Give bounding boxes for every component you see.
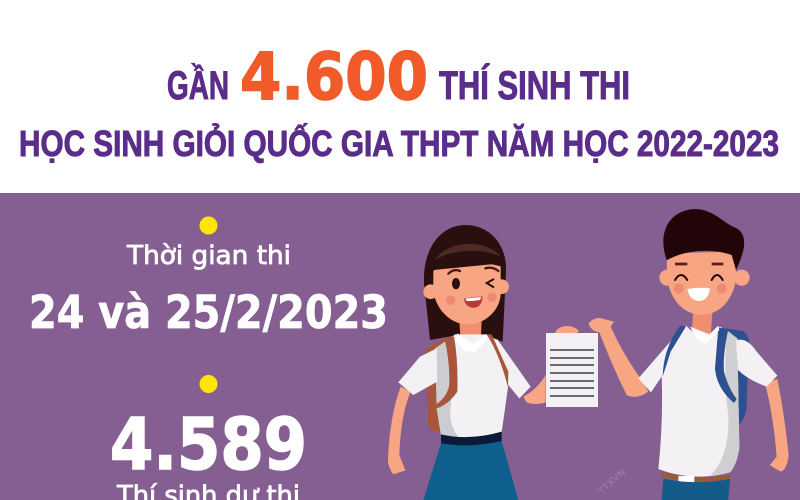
girl belt [441, 432, 502, 446]
girl ears [423, 279, 509, 299]
boy face [667, 252, 736, 315]
boy belt buckle [678, 476, 694, 483]
boy left sleeve [638, 340, 672, 392]
panel: purple background [0, 193, 800, 500]
boy eyes [675, 275, 723, 280]
girl back hair [424, 225, 506, 342]
paper text lines [550, 350, 594, 396]
value: candidate count: 4.589 [110, 403, 307, 486]
boy smile [687, 288, 710, 301]
girl left arm [388, 387, 411, 474]
value: exam date: 24 và 25/2/2023 [29, 286, 388, 339]
boy ears [659, 270, 750, 286]
girl right sleeve [497, 338, 531, 398]
girl brows [448, 268, 498, 274]
girl neck [459, 320, 482, 342]
boy shirt [658, 326, 739, 477]
girl collar [455, 333, 487, 352]
exam time block [29, 216, 388, 339]
boy collar [690, 326, 719, 344]
girl backpack [425, 338, 443, 432]
boy trousers [662, 478, 730, 500]
boy brows [675, 260, 723, 268]
paper sheet [546, 333, 598, 407]
girl backpack straps [434, 334, 508, 409]
girl fringe [432, 230, 502, 271]
boy cheeks [674, 284, 727, 294]
girl fringe highlight [435, 244, 501, 260]
girl hand on paper [555, 326, 579, 335]
boy right sleeve [736, 340, 777, 387]
girl winking eye [487, 279, 493, 287]
boy backpack [720, 328, 749, 428]
girl left sleeve [398, 348, 437, 395]
candidates block [110, 375, 307, 500]
girl face [433, 263, 501, 324]
girl teeth [465, 297, 481, 301]
boy shirt shade [711, 330, 739, 476]
boy right arm [765, 379, 789, 472]
girl right arm [523, 375, 546, 404]
boy hair [663, 209, 744, 270]
boy neck [692, 308, 713, 337]
illustration: exam paper [546, 326, 598, 407]
boy backpack straps [663, 326, 737, 403]
girl open eye [452, 278, 460, 289]
girl blouse shade [435, 342, 460, 439]
girl blouse [437, 334, 508, 438]
title number: 4.600: 4.600 [240, 40, 428, 115]
title words: thí sinh thi: THÍ SINH THI [439, 63, 630, 108]
girl smile [464, 296, 483, 308]
illustration: girl student [388, 225, 546, 500]
icon: yellow dot [200, 375, 218, 393]
title word: Gần: GẦN [167, 62, 229, 108]
label: exam time: Thời gian thi [126, 241, 291, 271]
girl cheeks [446, 292, 497, 305]
icon: yellow dot [200, 216, 218, 234]
girl skirt [423, 441, 518, 500]
title [19, 40, 779, 164]
boy belt [662, 472, 730, 482]
illustration: boy student [589, 209, 789, 500]
boy raised arm [589, 318, 648, 397]
watermark: TTXVN [596, 467, 628, 497]
